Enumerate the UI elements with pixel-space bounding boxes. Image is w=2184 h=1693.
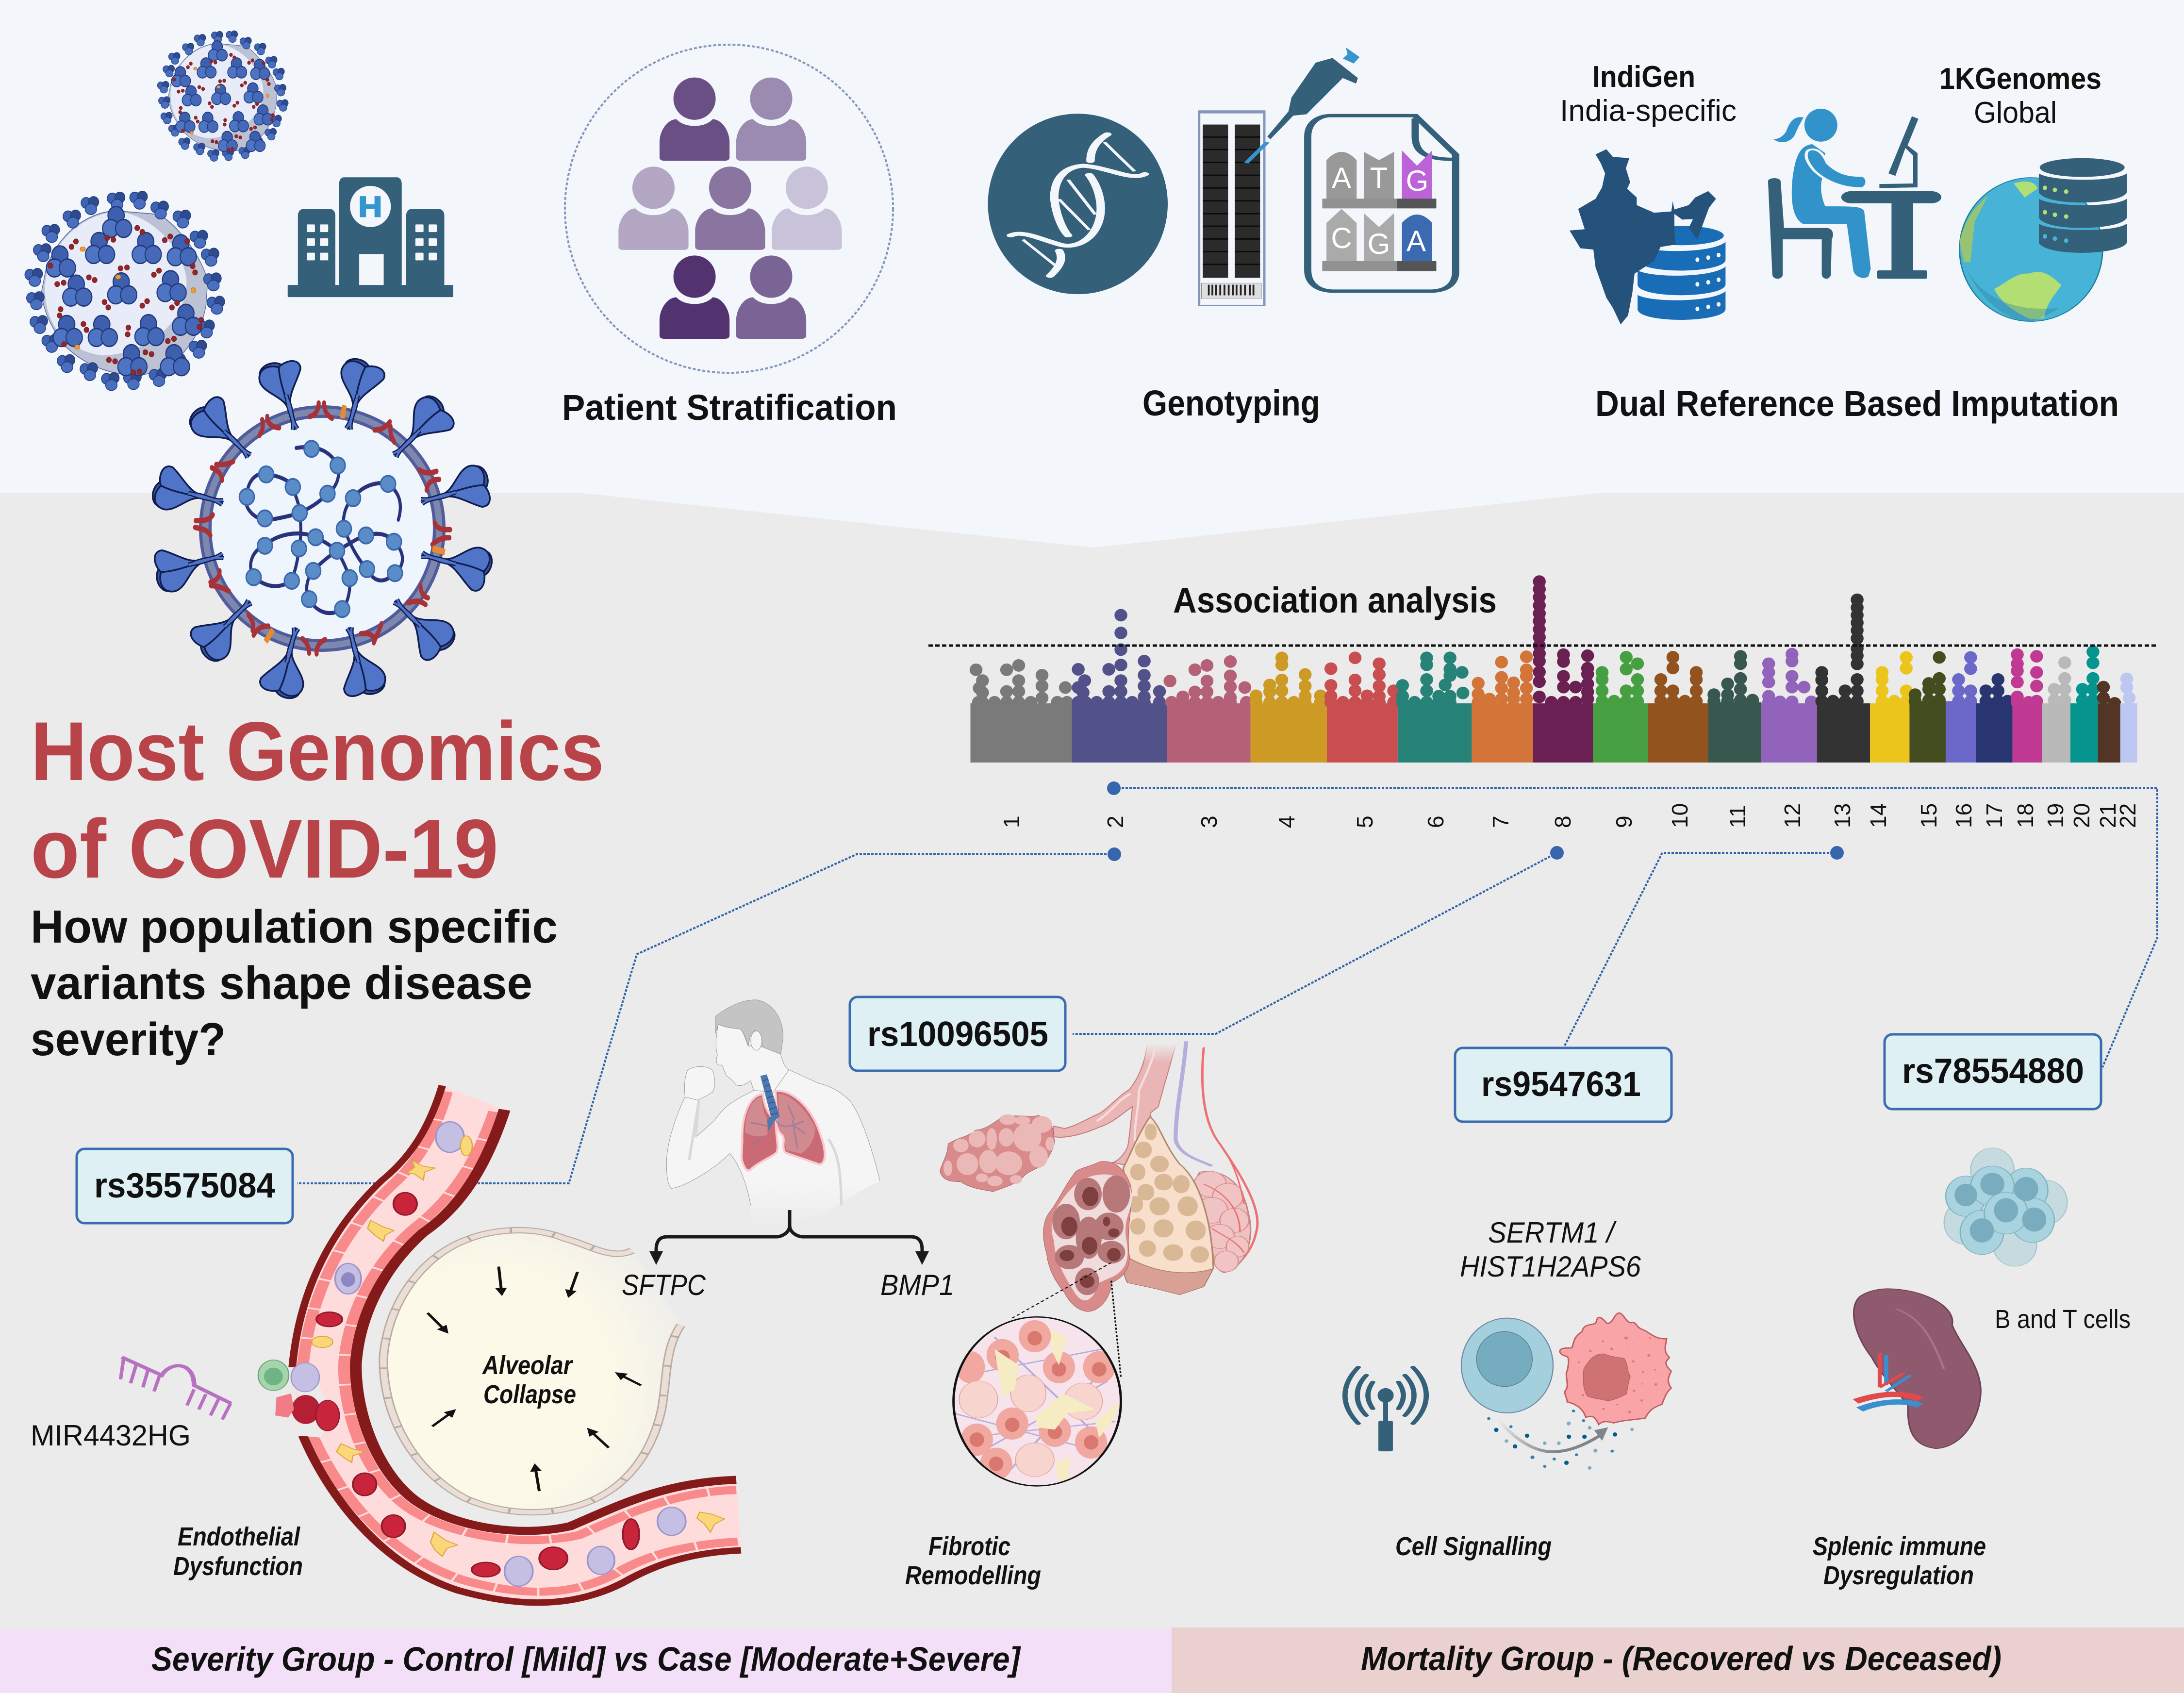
title	[31, 705, 604, 896]
platelets	[312, 1136, 725, 1556]
chromosome labels: 3	[1196, 815, 1222, 828]
chart heading: Association analysis	[1173, 580, 1497, 620]
callout: rs9547631	[1455, 1048, 1671, 1122]
chromosome labels: 14	[1866, 803, 1891, 828]
base letters: G	[1368, 228, 1390, 260]
chromosome labels: 11	[1725, 805, 1750, 828]
label: alveolar collapse	[481, 1351, 576, 1409]
arrows: gene branches	[649, 1210, 929, 1265]
significance threshold line	[928, 645, 2157, 647]
chromosome labels: 13	[1830, 803, 1855, 828]
icon: antenna	[1345, 1367, 1426, 1451]
label: splenic immune dysregulation: Splenic immune	[1813, 1532, 1986, 1561]
label: B and T cells: B and T cells	[1995, 1305, 2131, 1334]
vessel breach cells	[258, 1360, 339, 1438]
icon: small coronavirus	[157, 31, 288, 161]
base letters: T	[1370, 162, 1388, 194]
panel: genotyping	[988, 48, 1456, 423]
icon: large coronavirus	[25, 191, 225, 390]
chromosome labels: 8	[1550, 815, 1575, 828]
subtitle: How population specific	[31, 901, 558, 953]
title: Host Genomics	[31, 705, 604, 798]
chromosome labels: 6	[1423, 815, 1448, 828]
panel: dual reference based imputation	[1560, 60, 2127, 424]
chromosome labels: 21	[2095, 803, 2120, 828]
patient icons	[618, 78, 842, 339]
label: Global: Global	[1974, 96, 2057, 130]
icons: DNA, chip, pipette, sequence document	[988, 48, 1456, 305]
patient group dashed circle	[565, 45, 893, 373]
chromosome labels: 18	[2013, 803, 2038, 828]
label: alveolar collapse: Collapse	[483, 1380, 576, 1409]
panel: patient stratification	[562, 45, 897, 428]
label: endothelial dysfunction	[173, 1522, 303, 1581]
callout: rs78554880: rs78554880	[1902, 1052, 2084, 1091]
label: SERTM1 / HIST1H2APS6	[1460, 1216, 1641, 1283]
inward arrows	[428, 1267, 641, 1491]
chromosome labels	[999, 803, 2140, 828]
base letters: G	[1406, 165, 1428, 197]
footer band: mortality group: Mortality Group - (Recovered vs Deceased)	[1361, 1640, 2002, 1677]
chromosome labels: 19	[2043, 803, 2068, 828]
illustration: spleen	[1854, 1289, 1981, 1448]
heading: genotyping: Genotyping	[1142, 383, 1320, 423]
chromosome labels: 15	[1916, 803, 1941, 828]
base letters: C	[1331, 222, 1352, 254]
callout: rs78554880	[1885, 1034, 2101, 1109]
icon: main virus cross-section	[149, 356, 495, 701]
chromosome labels: 1	[999, 815, 1024, 828]
base letters: A	[1332, 162, 1351, 194]
callout: rs10096505	[850, 997, 1065, 1071]
label: fibrotic remodelling	[905, 1532, 1041, 1590]
label: splenic immune dysregulation	[1813, 1532, 1986, 1590]
illustration: cell signalling	[1461, 1313, 1671, 1470]
label: SERTM1 / HIST1H2APS6: SERTM1 /	[1488, 1216, 1617, 1249]
label: fibrotic remodelling: Fibrotic	[928, 1532, 1010, 1561]
label: splenic immune dysregulation: Dysregulation	[1823, 1561, 1974, 1590]
white blood cells	[335, 1122, 686, 1586]
red blood cells	[316, 1193, 639, 1577]
illustration: blood vessel	[258, 1086, 741, 1603]
illustration: alveolar lobules, fibrotic	[940, 1041, 1257, 1311]
illustration: alveolar collapse	[383, 1230, 681, 1512]
callout: rs35575084	[77, 1149, 293, 1223]
heading: dual reference based imputation: Dual Reference Based Imputation	[1595, 383, 2119, 424]
bars and variant dots	[970, 575, 2137, 763]
chromosome labels: 12	[1780, 803, 1805, 828]
footer band: severity group	[0, 1629, 1172, 1693]
label: BMP1: BMP1	[880, 1269, 954, 1301]
footer band: severity group: Severity Group - Control [Mild] vs Case [Moderate+Severe]	[151, 1640, 1021, 1678]
chromosome labels: 10	[1667, 803, 1692, 828]
base letters: A	[1406, 225, 1426, 257]
callout: rs9547631: rs9547631	[1481, 1065, 1641, 1104]
blue cell	[1461, 1318, 1553, 1413]
callout: rs35575084: rs35575084	[94, 1166, 275, 1205]
footer band: mortality group	[1172, 1627, 2184, 1693]
illustration: B and T cell cluster	[1944, 1148, 2067, 1266]
label: IndiGen: IndiGen	[1592, 60, 1695, 94]
chromosome labels: 9	[1611, 815, 1637, 828]
label: 1KGenomes: 1KGenomes	[1939, 62, 2101, 96]
label: endothelial dysfunction: Endothelial	[178, 1522, 300, 1551]
chart: Manhattan plot	[928, 575, 2157, 828]
subtitle: variants shape disease	[31, 957, 532, 1009]
connector lines: SNP to chromosome	[297, 788, 2157, 1183]
subtitle: severity?	[31, 1013, 226, 1065]
label: India-specific: India-specific	[1560, 94, 1737, 128]
subtitle	[31, 901, 558, 1065]
connector end dots	[1107, 781, 1844, 861]
chromosome labels: 20	[2069, 803, 2094, 828]
chromosome labels: 22	[2115, 803, 2140, 828]
icons: India database, analyst, globe database	[1570, 109, 2127, 324]
callout: rs10096505: rs10096505	[867, 1015, 1048, 1054]
chromosome labels: 4	[1274, 815, 1299, 828]
icon: hospital	[288, 177, 453, 297]
chromosome labels: 7	[1488, 815, 1513, 828]
title: of COVID-19	[31, 802, 498, 896]
chromosome labels: 5	[1352, 815, 1377, 828]
label: cell signalling: Cell Signalling	[1395, 1532, 1552, 1561]
chromosome labels: 16	[1951, 803, 1976, 828]
icon: MIR4432HG RNA	[120, 1357, 231, 1420]
base letters	[1331, 162, 1428, 260]
heading: patient stratification: Patient Stratification	[562, 387, 897, 428]
label: SFTPC: SFTPC	[622, 1269, 706, 1301]
label: SERTM1 / HIST1H2APS6: HIST1H2APS6	[1460, 1250, 1641, 1283]
chromosome labels: 2	[1103, 815, 1128, 828]
signalling arrow and molecules	[1487, 1410, 1634, 1470]
illustration: coughing man with lungs	[666, 1000, 880, 1226]
chromosome labels: 17	[1982, 803, 2007, 828]
pink cell	[1560, 1313, 1671, 1425]
label: alveolar collapse: Alveolar	[481, 1351, 574, 1380]
label: endothelial dysfunction: Dysfunction	[173, 1552, 303, 1581]
alveolus body and wall	[383, 1230, 681, 1512]
illustration: fibrotic tissue magnifier	[954, 1262, 1123, 1486]
label: fibrotic remodelling: Remodelling	[905, 1561, 1041, 1590]
label: MIR4432HG: MIR4432HG	[31, 1419, 191, 1452]
